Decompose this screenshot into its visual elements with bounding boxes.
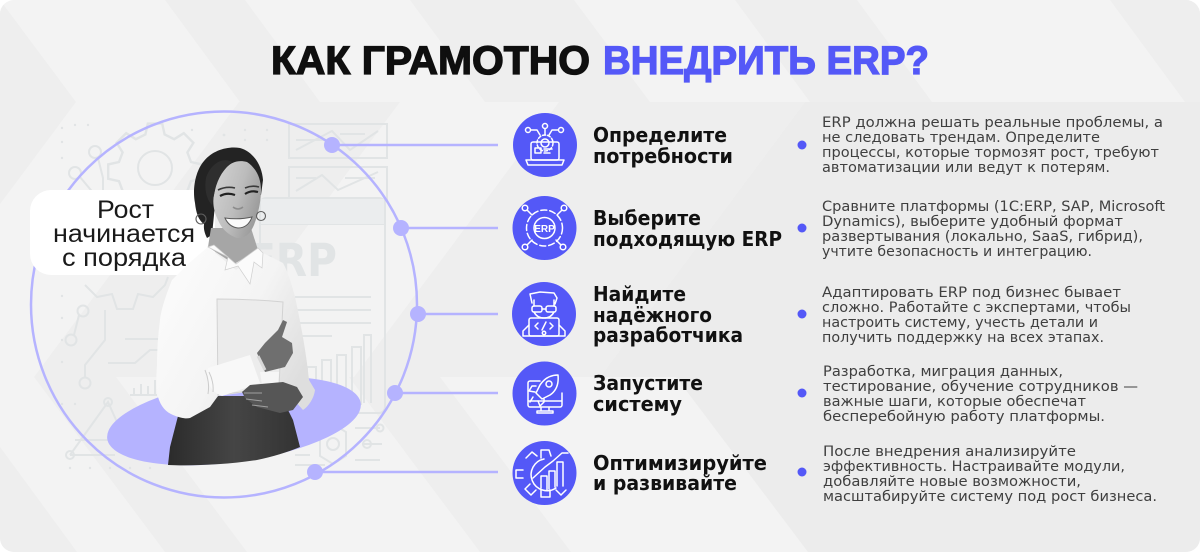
callout: начинается xyxy=(53,220,195,248)
circuit lines and dots xyxy=(66,306,165,459)
description: настроить систему, учесть детали и xyxy=(822,315,1098,331)
lilac ellipse xyxy=(102,363,366,479)
heading: Определите xyxy=(593,123,727,147)
tablet corner xyxy=(260,372,279,387)
face xyxy=(213,161,261,238)
description: ERP должна решать реальные проблемы, а xyxy=(822,115,1163,131)
back hair and bun xyxy=(194,148,263,238)
heading: Запустите xyxy=(593,371,703,395)
description: развертывания (локально, SaaS, гибрид), xyxy=(822,229,1143,245)
heading xyxy=(593,206,782,251)
description: бесперебойную работу платформы. xyxy=(823,409,1105,425)
heading xyxy=(593,451,767,495)
tablet xyxy=(217,299,283,395)
description: не следовать трендам. Определите xyxy=(822,130,1100,146)
callout: с порядка xyxy=(62,244,186,272)
bullet xyxy=(798,388,806,398)
heading: надёжного xyxy=(593,303,712,327)
watch xyxy=(258,356,265,370)
heading xyxy=(593,371,703,416)
description: тестирование, обучение сотрудников — xyxy=(823,379,1138,395)
description: эффективность. Настраивайте модули, xyxy=(823,459,1125,475)
description: сложно. Работайте с экспертами, чтобы xyxy=(822,300,1131,316)
description: Dynamics), выберите удобный формат xyxy=(822,214,1123,230)
heading xyxy=(593,123,733,168)
hair front strand xyxy=(205,160,232,205)
woman with tablet xyxy=(156,148,315,465)
callout xyxy=(30,190,215,275)
description: добавляйте новые возможности, xyxy=(823,474,1081,490)
title xyxy=(271,39,929,83)
title: ВНЕДРИТЬ ERP? xyxy=(603,39,929,83)
upper hand xyxy=(257,320,293,372)
description: После внедрения анализируйте xyxy=(823,444,1076,460)
lower right gear xyxy=(295,424,384,465)
callout: Рост xyxy=(97,196,155,224)
document with ERP heading: ERP xyxy=(248,234,337,287)
heading: потребности xyxy=(593,144,733,168)
description: Сравните платформы (1С:ERP, SAP, Microsoft xyxy=(822,199,1166,215)
step 1 xyxy=(513,113,1163,177)
smile xyxy=(225,217,252,228)
step 5 xyxy=(512,441,1157,505)
title: КАК ГРАМОТНО xyxy=(271,39,590,83)
icon: gear with growth chart xyxy=(512,441,576,505)
bullet xyxy=(798,310,806,318)
chart panels xyxy=(289,124,387,201)
heading: и развивайте xyxy=(593,471,737,495)
bullet xyxy=(798,224,806,232)
connector lines xyxy=(315,145,498,472)
earrings xyxy=(196,212,266,224)
description: Адаптировать ERP под бизнес бывает xyxy=(822,285,1121,301)
description: Разработка, миграция данных, xyxy=(823,364,1063,380)
step 2 xyxy=(512,196,1166,260)
heading: подходящую ERP xyxy=(593,227,782,251)
heading: Выберите xyxy=(593,206,701,230)
icon: rocket and monitor xyxy=(512,362,576,426)
description xyxy=(823,364,1138,425)
nose xyxy=(233,207,243,209)
document with ERP heading xyxy=(248,198,385,413)
description: масштабируйте систему под рост бизнеса. xyxy=(823,489,1157,505)
dot grid xyxy=(61,124,268,469)
collar xyxy=(208,245,263,284)
heading: Найдите xyxy=(593,282,686,306)
gears xyxy=(69,124,202,309)
description xyxy=(822,285,1131,346)
bullet xyxy=(798,468,806,476)
description xyxy=(823,444,1157,505)
step 4 xyxy=(512,362,1138,426)
large circle with nodes xyxy=(31,112,426,498)
neck xyxy=(208,228,258,264)
heading xyxy=(593,282,743,347)
description xyxy=(822,199,1166,260)
description xyxy=(822,115,1163,176)
shirt xyxy=(156,247,315,418)
description: автоматизации или ведут к потерям. xyxy=(822,160,1110,176)
icon: ERP gear: ERP xyxy=(534,224,555,235)
heading: систему xyxy=(593,392,682,416)
description: учтите безопасность и интеграцию. xyxy=(822,244,1092,260)
trousers xyxy=(168,396,300,465)
icon: developer xyxy=(512,282,576,346)
heading: Оптимизируйте xyxy=(593,451,767,475)
icon: ERP gear xyxy=(512,196,576,260)
brows and eyes xyxy=(218,186,259,190)
description: процессы, которые тормозят рост, требуют xyxy=(822,145,1159,161)
step 3 xyxy=(512,282,1131,347)
icon: laptop with gear xyxy=(513,113,577,177)
heading: разработчика xyxy=(593,323,743,347)
description: важные шаги, которые обеспечат xyxy=(823,394,1086,410)
bullet xyxy=(798,140,806,150)
description: получить поддержку на всех этапах. xyxy=(822,330,1104,346)
lower hand xyxy=(242,382,303,413)
faint ERP background illustration xyxy=(61,124,387,469)
sleeve cuff xyxy=(205,355,260,396)
